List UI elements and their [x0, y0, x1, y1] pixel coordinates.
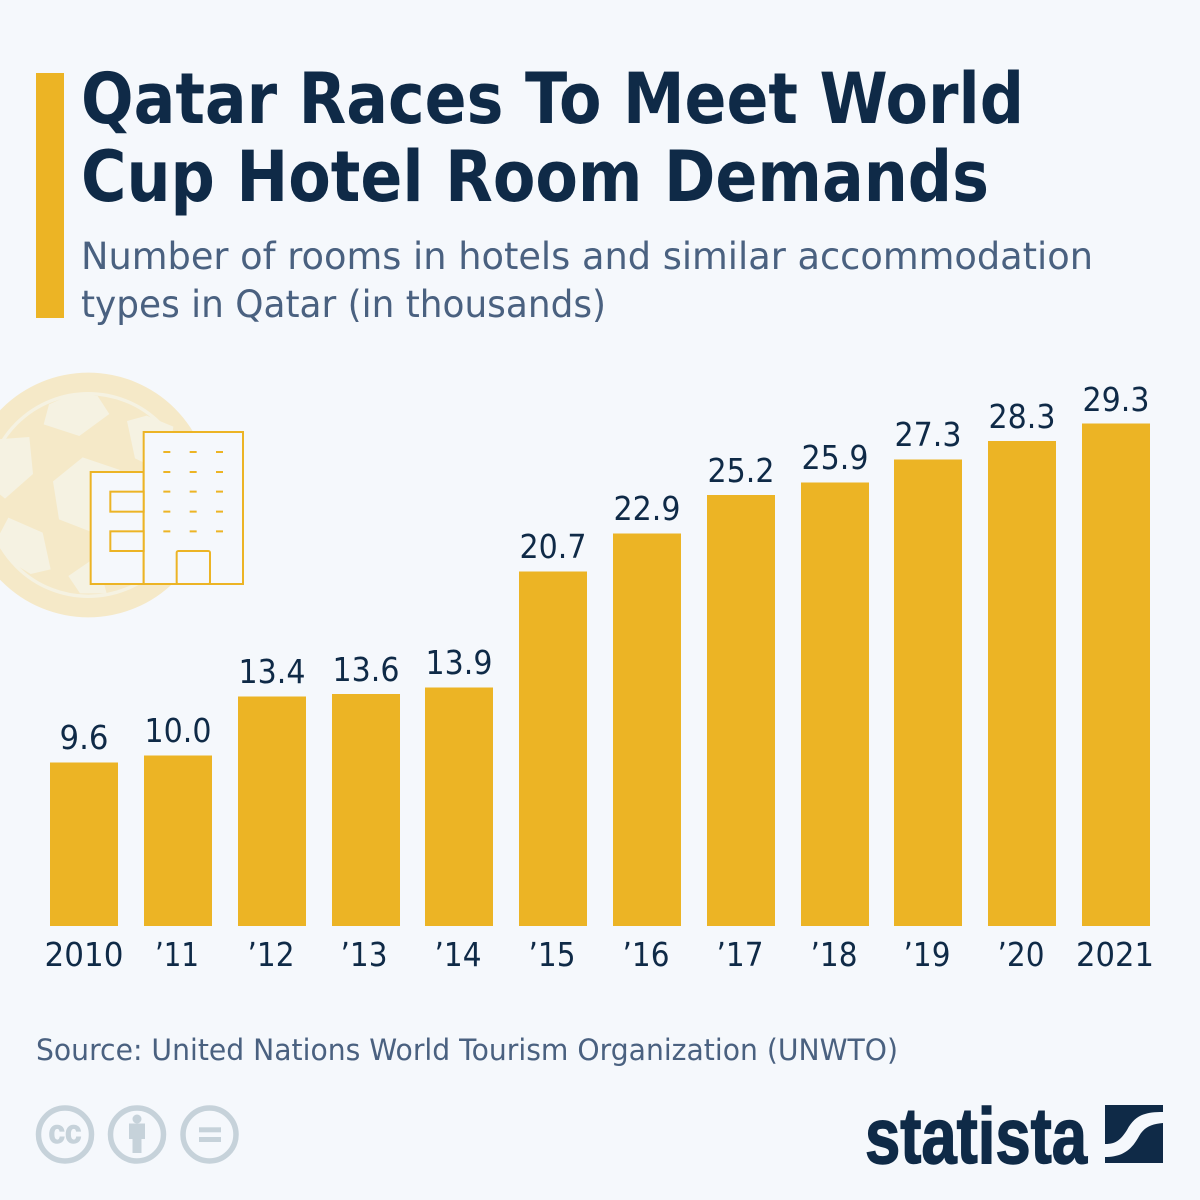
year labels — [44, 935, 1154, 974]
value labels: 25.2 — [708, 451, 774, 490]
icon: creative commons licence — [38, 1108, 236, 1161]
bars — [50, 424, 1150, 926]
value labels: 29.3 — [1082, 380, 1150, 419]
icon: hotel building — [91, 432, 243, 584]
value labels: 13.4 — [238, 652, 306, 691]
source: Source: United Nations World Tourism Organization (UNWTO) — [36, 1033, 898, 1067]
year labels: 2010 — [44, 935, 124, 974]
logo wordmark: statista — [865, 1091, 1088, 1180]
value labels: 22.9 — [614, 489, 680, 528]
value labels: 9.6 — [60, 718, 108, 757]
value labels: 13.9 — [426, 643, 492, 682]
icon: attribution — [110, 1108, 164, 1161]
year labels: ’12 — [248, 935, 294, 974]
year labels: ’13 — [340, 935, 388, 974]
title: Qatar Races To Meet World — [81, 58, 1024, 140]
year labels: ’20 — [998, 935, 1044, 974]
year labels: ’17 — [716, 935, 764, 974]
subtitle — [81, 235, 1093, 326]
year labels: 2021 — [1076, 935, 1154, 974]
icon: soccer ball — [0, 373, 211, 617]
subtitle: Number of rooms in hotels and similar accommodation — [81, 235, 1093, 278]
bar chart — [44, 380, 1154, 974]
icon: cc: cc — [48, 1113, 82, 1150]
value labels: 13.6 — [332, 650, 400, 689]
title: Cup Hotel Room Demands — [81, 136, 989, 218]
year labels: ’18 — [810, 935, 858, 974]
value labels: 20.7 — [520, 527, 586, 566]
year labels: ’14 — [434, 935, 482, 974]
accent bar — [36, 73, 64, 318]
value labels: 28.3 — [988, 397, 1056, 436]
year labels: ’15 — [528, 935, 576, 974]
title — [81, 58, 1024, 218]
statista logo — [865, 1091, 1163, 1180]
value labels: 27.3 — [894, 415, 962, 454]
logo mark — [1105, 1105, 1163, 1163]
year labels: ’11 — [155, 935, 199, 974]
year labels: ’19 — [904, 935, 950, 974]
year labels: ’16 — [622, 935, 670, 974]
value labels: 25.9 — [802, 438, 868, 477]
value labels: 10.0 — [144, 711, 212, 750]
icon: soccer ball and hotel — [0, 373, 243, 617]
subtitle: types in Qatar (in thousands) — [81, 283, 606, 326]
icon: cc — [38, 1108, 92, 1161]
value labels — [60, 380, 1150, 757]
icon: no derivatives — [183, 1108, 236, 1161]
